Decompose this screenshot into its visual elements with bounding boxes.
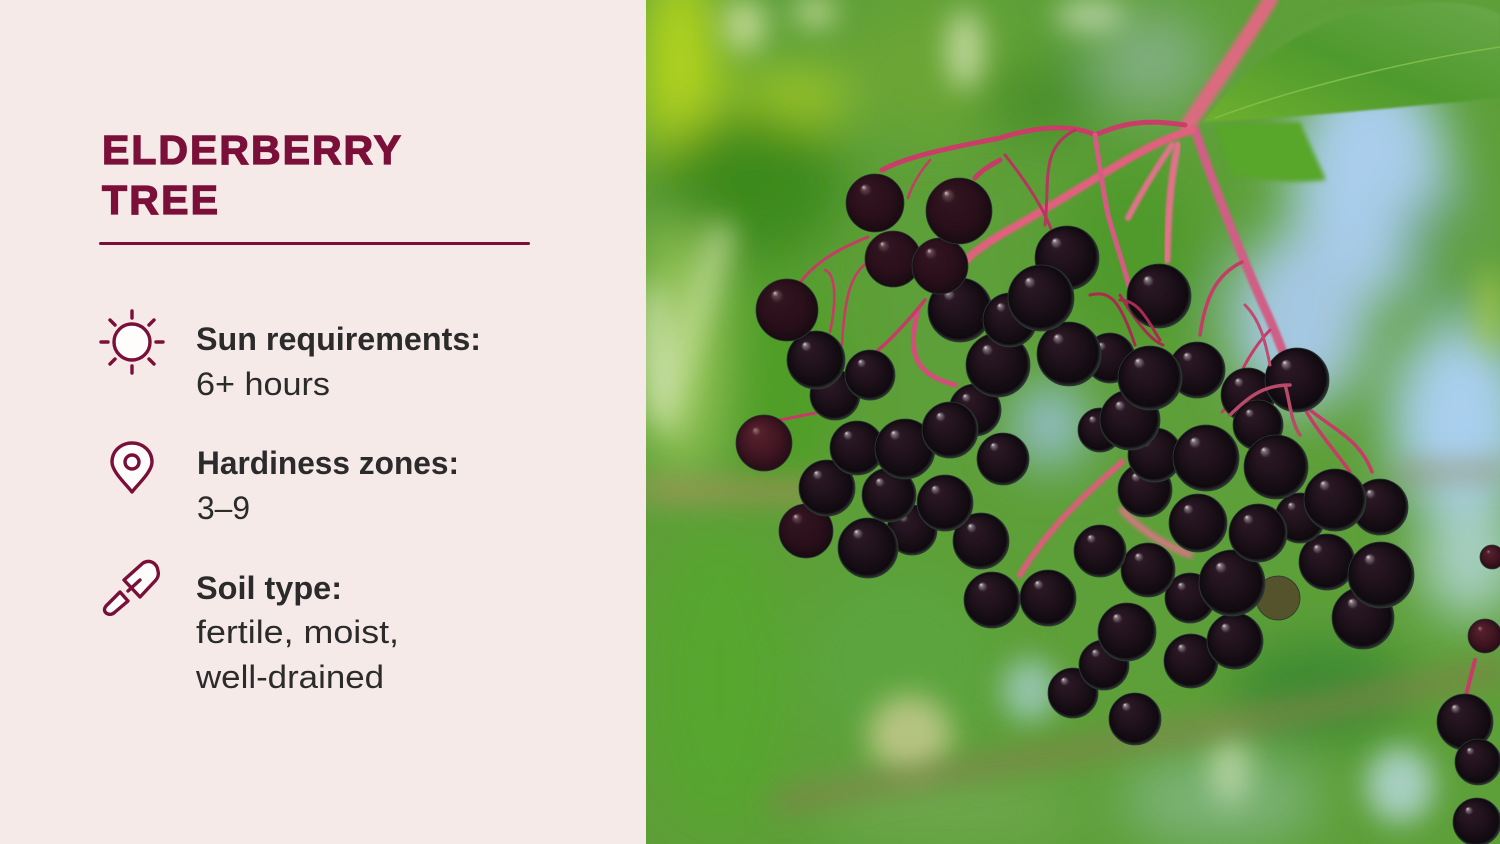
leaf: top right: [1203, 2, 1500, 182]
text: hardiness zones: Hardiness zones:: [197, 445, 459, 481]
text: sun requirements: [196, 321, 481, 402]
text: hardiness zones: 3–9: [197, 490, 250, 526]
text: soil type: well-drained: [195, 659, 384, 695]
text: soil type: fertile, moist,: [196, 614, 399, 650]
text: hardiness zones: [197, 445, 459, 526]
berries: [736, 174, 1500, 844]
title: TREE: [102, 177, 218, 223]
text: soil type: [195, 570, 399, 695]
text: soil type: Soil type:: [196, 570, 342, 606]
photo: elderberry cluster: [640, 0, 1500, 844]
photo background: blurred foliage and sky: [640, 0, 1500, 844]
icon: sun: [101, 311, 163, 373]
text: sun requirements: 6+ hours: [196, 366, 330, 402]
title underline: [99, 242, 530, 245]
title: [102, 127, 401, 223]
icon: garden trowel: [105, 561, 158, 614]
text: sun requirements: Sun requirements:: [196, 321, 481, 357]
panel: text panel background: [0, 0, 646, 844]
title: ELDERBERRY: [102, 127, 401, 173]
stems over berries: [1090, 294, 1300, 435]
stems: [780, 0, 1475, 695]
icon: map pin: [112, 443, 152, 492]
photo background: blurred branches: [646, 470, 1500, 802]
